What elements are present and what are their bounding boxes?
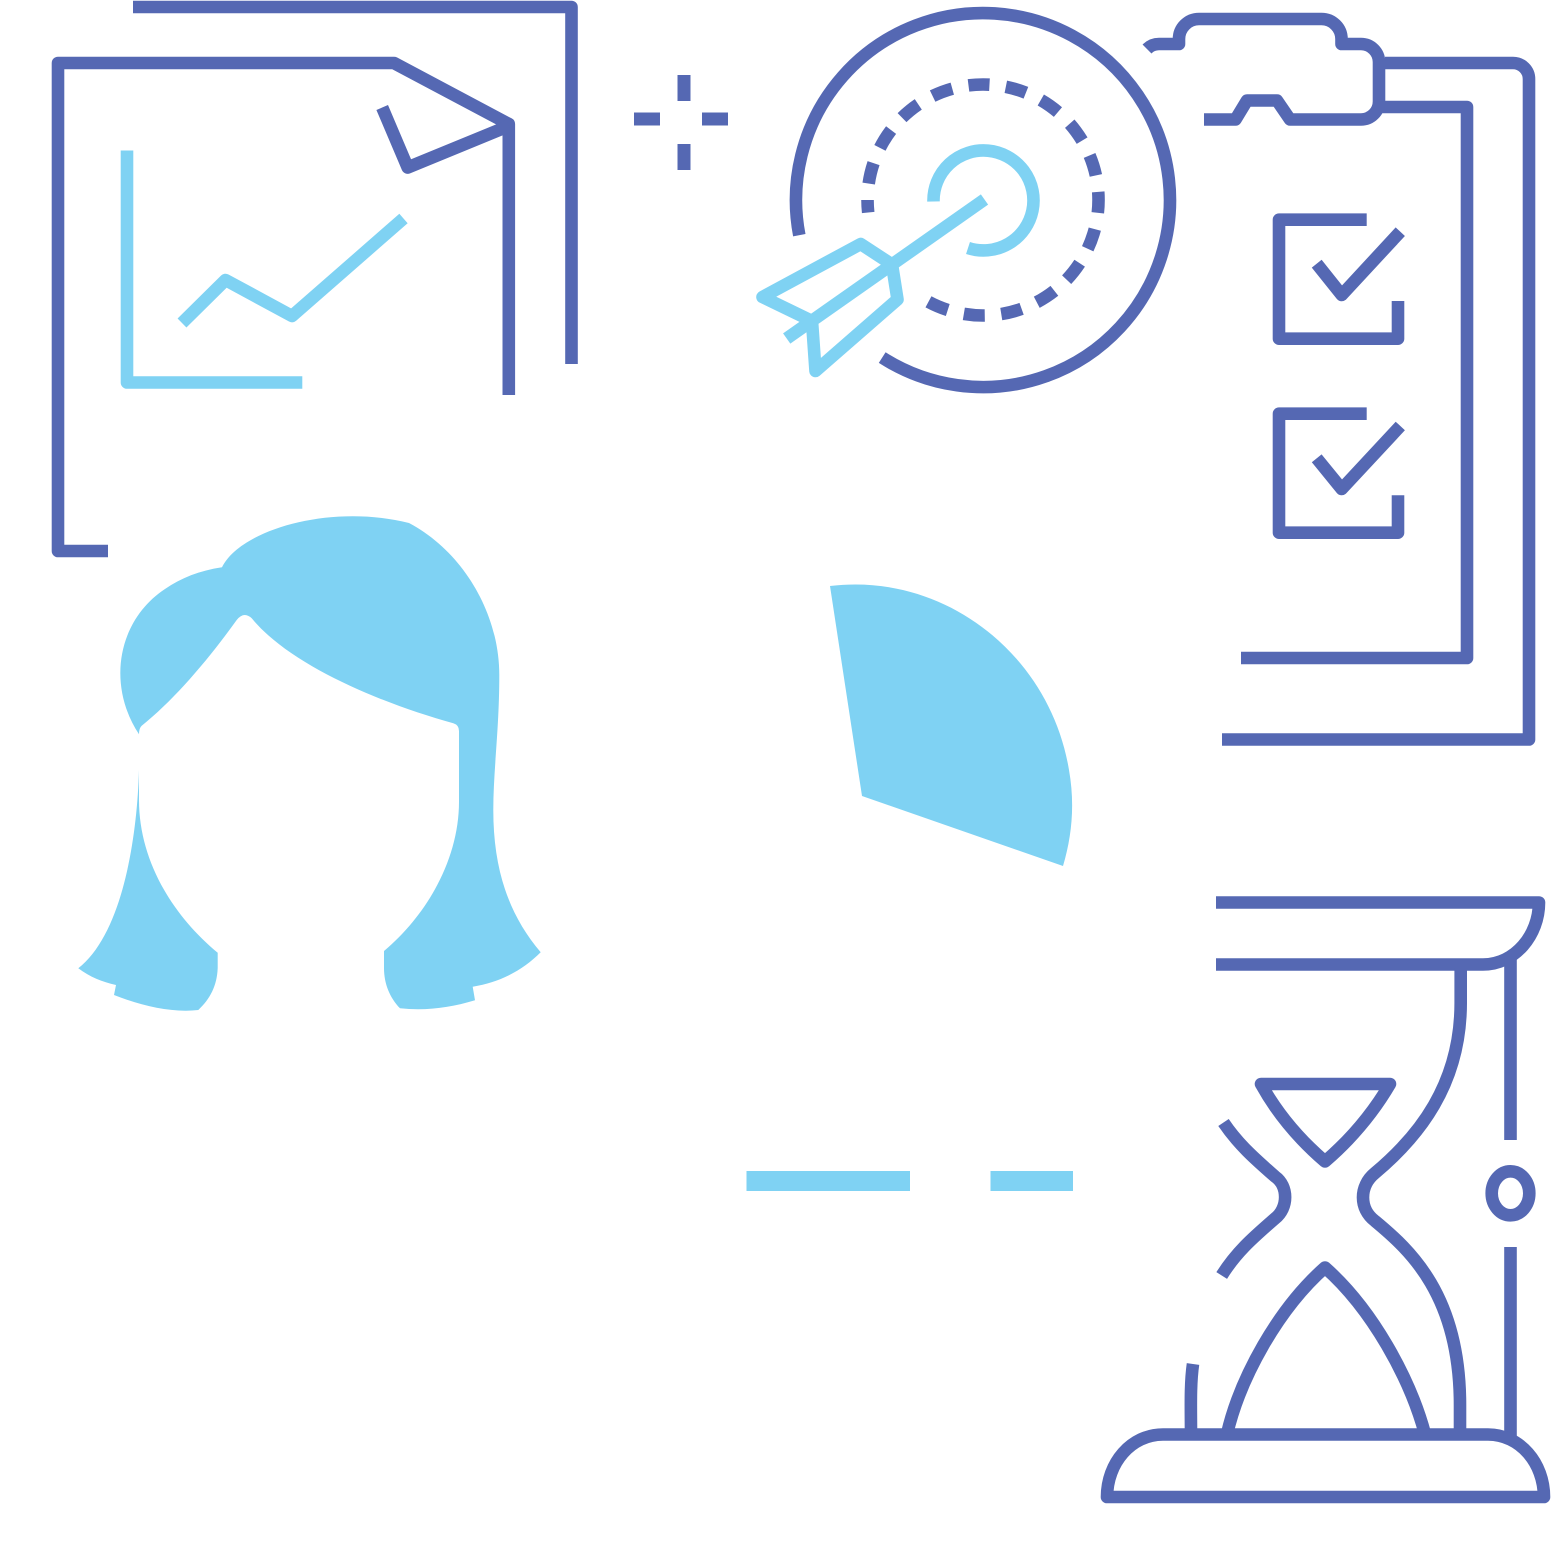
icon: target with paper plane bbox=[762, 13, 1170, 387]
pie chart wedge bbox=[830, 584, 1072, 866]
icon: sparkle bbox=[634, 75, 728, 170]
icon: checklist clipboard bbox=[1147, 19, 1529, 740]
dashed divider bars bbox=[746, 1171, 1073, 1191]
icon: presentation chart bbox=[58, 7, 572, 551]
icon: woman hair silhouette bbox=[78, 516, 541, 1011]
icon: hourglass bbox=[1107, 902, 1544, 1497]
